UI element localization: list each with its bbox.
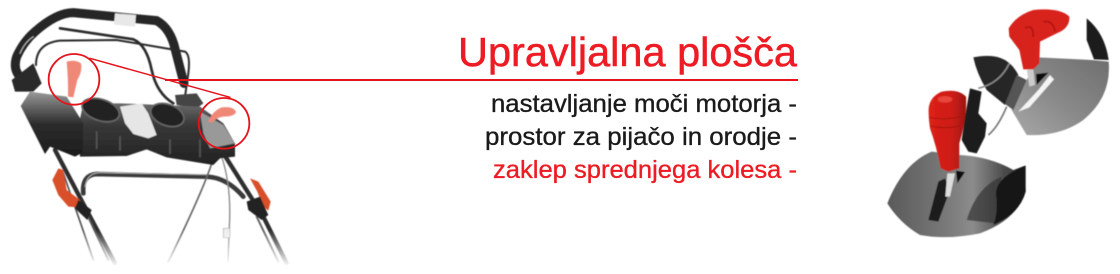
photo: lever close-ups [887,9,1109,237]
photo: mower handlebar and control panel [0,13,300,267]
red callout circles and leader line [49,54,249,149]
feature: storage: prostor za pijačo in orodje - [485,123,797,151]
upper right close-up [973,9,1109,135]
feature: engine power: nastavljanje moči motorja - [491,90,797,118]
control panel body [21,92,235,165]
top handle [12,13,203,108]
leader line to heading [165,79,798,81]
centre pivot and cable [962,88,1007,153]
heading: Upravljalna plošča [458,29,797,75]
photo artwork [12,13,287,263]
bottom fade [0,230,300,267]
orange clips [52,168,271,220]
faded levers [67,61,236,123]
feature: front wheel lock: zaklep sprednjega kolesa - [493,156,797,184]
feature list [485,90,797,184]
lower frame and cables [55,150,287,263]
lower left close-up [887,91,1026,237]
